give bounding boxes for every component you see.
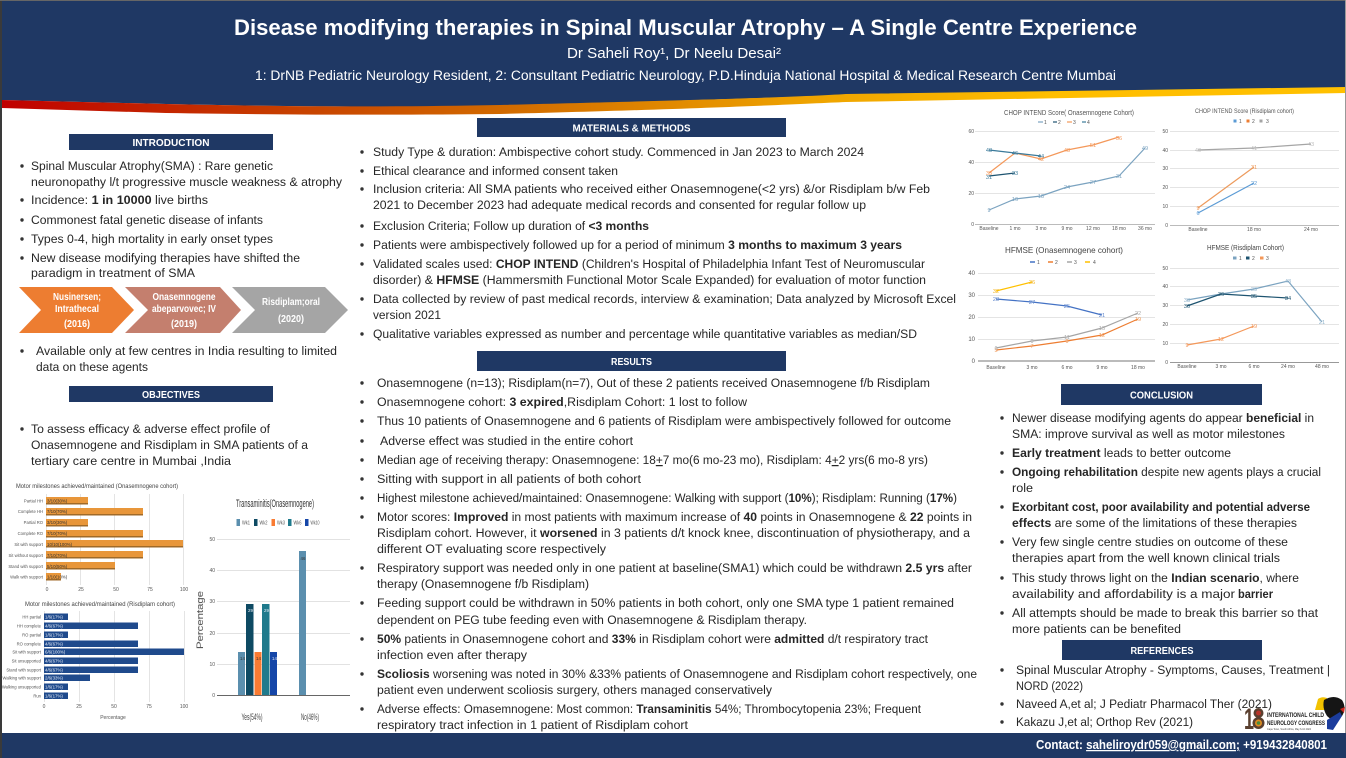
chart: HFMSE Onasemnogene bbox=[968, 245, 1155, 371]
methods bullets: Ethical clearance and informed consent taken bbox=[373, 164, 618, 178]
reference list: Spinal Muscular Atrophy - Symptoms, Causes, Treatment | bbox=[1016, 663, 1330, 677]
chart: HFMSE Risdiplam: 24 mo bbox=[1281, 364, 1295, 370]
chart: HFMSE Onasemnogene: 21 bbox=[1099, 313, 1105, 319]
chart: CHOP INTEND Onasemnogene bbox=[968, 110, 1155, 232]
chart: HFMSE Onasemnogene: 30 bbox=[968, 293, 976, 299]
chart: motor milestones Risdiplam: HH complete bbox=[17, 624, 42, 628]
chart: HFMSE Onasemnogene: 7 bbox=[1030, 344, 1034, 350]
chart: CHOP INTEND Onasemnogene: 48 bbox=[986, 148, 992, 154]
chart: motor milestones Onasemnogene: 50 bbox=[113, 587, 119, 593]
chart: HFMSE Risdiplam: 40 bbox=[1162, 284, 1168, 290]
results bullets: infection even after therapy bbox=[377, 648, 528, 662]
heading: objectives bbox=[69, 386, 273, 402]
header banner bbox=[2, 1, 1346, 115]
chart: HFMSE Risdiplam: 2 bbox=[1252, 256, 1255, 262]
chart: HFMSE Onasemnogene: 20 bbox=[968, 315, 976, 321]
methods bullets: Data collected by review of past medical records, interview & examination; Data analyzed by Microsoft Excel bbox=[373, 292, 956, 306]
chart: HFMSE Onasemnogene: 32 bbox=[993, 289, 999, 295]
chart: HFMSE Risdiplam: 19 bbox=[1251, 324, 1257, 330]
chart: HFMSE Onasemnogene: 25 bbox=[1064, 304, 1070, 310]
objectives text: To assess efficacy & adverse effect profile of bbox=[31, 422, 271, 436]
heading: results bbox=[477, 351, 786, 371]
chart: CHOP INTEND Onasemnogene: 18 mo bbox=[1112, 226, 1126, 232]
affiliations: 1: DrNB Pediatric Neurology Resident, 2: Consultant Pediatric Neurology, P.D.Hinduja National Hospital & Medical Research Centre Mumbai bbox=[255, 68, 1116, 83]
chart: CHOP INTEND Risdiplam: 22 bbox=[1251, 181, 1257, 187]
results bullets: Adverse effects: Omasemnogene: Most common: Transaminitis 54%; Thrombocytopenia 23%; Frequent bbox=[377, 702, 922, 716]
chart: CHOP INTEND Onasemnogene: 42 bbox=[1038, 157, 1044, 163]
logo: International Child Neurology Congress: INTERNATIONAL CHILD bbox=[1267, 712, 1324, 719]
chart: CHOP INTEND Onasemnogene: 31 bbox=[1116, 174, 1122, 180]
header accent wave bbox=[2, 87, 1346, 115]
chart: CHOP INTEND Onasemnogene: 31 bbox=[986, 175, 992, 181]
chart: CHOP INTEND Onasemnogene: 44 bbox=[1038, 154, 1044, 160]
panel: conclusion bbox=[1000, 384, 1321, 636]
conclusion bullets: Very few single centre studies on outcome of these bbox=[1012, 535, 1288, 549]
methods bullets: Validated scales used: CHOP INTEND (Children's Hospital of Philadelphia Infant Test of Neuromuscular bbox=[373, 257, 925, 271]
chart: HFMSE Risdiplam: 10 bbox=[1162, 341, 1168, 347]
chart: CHOP INTEND Risdiplam: Baseline bbox=[1188, 227, 1208, 233]
chart: HFMSE Risdiplam: 36 bbox=[1218, 292, 1224, 298]
chart: motor milestones Risdiplam: Stand with support bbox=[6, 668, 42, 672]
chart: CHOP INTEND Onasemnogene: 3 mo bbox=[1035, 226, 1047, 232]
chart: CHOP INTEND Onasemnogene: Baseline bbox=[979, 226, 999, 232]
heading: materials and methods: MATERIALS & METHODS bbox=[572, 122, 690, 134]
methods bullets bbox=[360, 145, 956, 341]
chart: CHOP INTEND Onasemnogene: 9 bbox=[987, 208, 991, 214]
chart: motor milestones Risdiplam: 2/6(33%) bbox=[45, 676, 63, 680]
legend: weeks: Wk2 bbox=[260, 520, 268, 526]
chart: HFMSE Onasemnogene: 40 bbox=[968, 271, 976, 277]
chart: transaminitis: 10 bbox=[209, 662, 215, 668]
bars: 14 bbox=[272, 656, 277, 661]
conclusion bullets: All attempts should be made to break this barrier so that bbox=[1012, 606, 1319, 620]
logo: International Child Neurology Congress: 1 bbox=[1244, 703, 1254, 736]
chart: CHOP INTEND Risdiplam: 40 bbox=[1195, 148, 1201, 154]
methods bullets: version 2021 bbox=[373, 308, 441, 322]
methods bullets: Exclusion Criteria; Follow up duration of <3 months bbox=[373, 219, 649, 233]
chart: transaminitis: 20 bbox=[209, 631, 215, 637]
chart: HFMSE Onasemnogene: 6 mo bbox=[1061, 365, 1073, 371]
chart: CHOP INTEND Risdiplam: 2 bbox=[1252, 119, 1255, 125]
chart: motor milestones Onasemnogene: 3/10(30%) bbox=[47, 520, 68, 525]
chart: HFMSE Risdiplam: HFMSE (Risdiplam Cohort) bbox=[1207, 245, 1284, 252]
chart: HFMSE Risdiplam: 35 bbox=[1251, 294, 1257, 300]
chart: CHOP INTEND Onasemnogene: 2 bbox=[1058, 120, 1061, 126]
chart: motor milestones Onasemnogene: 0 bbox=[46, 587, 49, 593]
chart: motor milestones Risdiplam: 50 bbox=[111, 704, 117, 710]
legend: weeks: Wk10 bbox=[310, 520, 320, 526]
introduction bullets: Spinal Muscular Atrophy(SMA) : Rare genetic bbox=[31, 159, 273, 173]
chart: HFMSE Onasemnogene: Baseline bbox=[986, 365, 1006, 371]
bars: 29 bbox=[248, 608, 253, 613]
chevron: Onasemnogene 2019: Onasemnogene bbox=[152, 291, 216, 303]
footer bar bbox=[2, 733, 1346, 758]
chart: transaminitis: No(46%) bbox=[301, 712, 319, 722]
chevron: Risdiplam 2020: Risdiplam;oral bbox=[262, 296, 320, 308]
chart: transaminitis: Percentage bbox=[195, 591, 206, 649]
chart: HFMSE Risdiplam: Baseline bbox=[1177, 364, 1197, 370]
conclusion bullets: This study throws light on the Indian scenario, where bbox=[1012, 571, 1299, 585]
chart: HFMSE Onasemnogene: 0 bbox=[972, 359, 976, 365]
chart: HFMSE Onasemnogene: 15 bbox=[1099, 326, 1105, 332]
bars: 14 bbox=[256, 656, 261, 661]
methods bullets: Qualitative variables expressed as number and percentage while quantitative variables as median/SD bbox=[373, 327, 917, 341]
chevron: Onasemnogene 2019: (2019) bbox=[171, 318, 197, 330]
chart: motor milestones Onasemnogene: 7/10(70%) bbox=[47, 553, 68, 558]
chart: motor milestones Risdiplam: Percentage bbox=[100, 715, 126, 721]
chart: transaminitis: Yes(54%) bbox=[242, 712, 262, 722]
introduction bullets: Commonest fatal genetic disease of infants bbox=[31, 213, 263, 227]
chart: CHOP INTEND Risdiplam: 24 mo bbox=[1304, 227, 1318, 233]
chart: motor milestones Risdiplam: 1/6(17%) bbox=[45, 632, 63, 638]
chart: HFMSE Risdiplam: 50 bbox=[1162, 266, 1168, 272]
chevron: Onasemnogene 2019 bbox=[125, 287, 241, 333]
methods bullets: Patients were ambispectively followed up for a period of minimum 3 months to maximum 3 years bbox=[373, 238, 902, 252]
chart: motor milestones Onasemnogene: 25 bbox=[78, 587, 84, 593]
chart: transaminitis: 0 bbox=[212, 693, 215, 699]
methods bullets: Study Type & duration: Ambispective cohort study. Commenced in Jan 2023 to March 2024 bbox=[373, 145, 864, 159]
chart: motor milestones Onasemnogene: 100 bbox=[180, 587, 188, 593]
heading: references bbox=[1062, 640, 1262, 660]
chart: motor milestones Onasemnogene: Complete RO bbox=[18, 531, 44, 536]
chart: motor milestones Risdiplam: 4/6(67%) bbox=[45, 624, 63, 628]
reference list bbox=[1000, 663, 1330, 729]
chart: HFMSE Onasemnogene: 28 bbox=[993, 297, 999, 303]
chart: CHOP INTEND Onasemnogene: 20 bbox=[968, 191, 974, 197]
chart: motor milestones Onasemnogene: Motor milestones achieved/maintained (Onasemnogene cohort) bbox=[16, 483, 178, 490]
chart: motor milestones Risdiplam: RO complete bbox=[17, 642, 42, 646]
heading: conclusion bbox=[1061, 384, 1262, 405]
chart: motor milestones Risdiplam: 4/6(67%) bbox=[45, 658, 63, 664]
chart: HFMSE Risdiplam: 43 bbox=[1285, 279, 1291, 285]
chart: CHOP INTEND Onasemnogene: 40 bbox=[968, 160, 974, 166]
chart: motor milestones Risdiplam: 100 bbox=[180, 704, 188, 710]
conclusion bullets: Early treatment leads to better outcome bbox=[1012, 446, 1231, 460]
results bullets: Thus 10 patients of Onasemnogene and 6 patients of Risdiplam were ambispectively followed for outcome bbox=[377, 414, 951, 428]
conclusion bullets: therapies apart from the well known clinical trials bbox=[1012, 551, 1280, 565]
chart: HFMSE Onasemnogene: 9 bbox=[1030, 339, 1034, 345]
chart: motor milestones Risdiplam: 1/6(17%) bbox=[45, 694, 63, 698]
chart: motor milestones Risdiplam: HH partial bbox=[22, 614, 41, 620]
chart: CHOP INTEND Onasemnogene: 16 bbox=[1012, 197, 1018, 203]
bars: 29 bbox=[264, 608, 269, 613]
chart: HFMSE Onasemnogene: 1 bbox=[1037, 260, 1040, 266]
chart: CHOP INTEND Risdiplam: 9 bbox=[1196, 206, 1200, 212]
panel: materials and methods bbox=[360, 118, 956, 341]
results bullets: patient even underwent scoliosis surgery, others managed conservatively bbox=[377, 683, 773, 697]
chevron: Nusinersen 2016: Intrathecal bbox=[55, 303, 99, 315]
chart: HFMSE Risdiplam: 12 bbox=[1218, 337, 1224, 343]
chart: motor milestones Risdiplam: Walking with support bbox=[3, 676, 42, 680]
chart: HFMSE Risdiplam: 9 bbox=[1185, 343, 1189, 349]
chart: transaminitis: Transaminitis(Onasemnogene) bbox=[236, 498, 314, 510]
chevron: Onasemnogene 2019: abeparvovec; IV bbox=[152, 303, 216, 315]
conclusion bullets: Newer disease modifying agents do appear beneficial in bbox=[1012, 411, 1314, 425]
chart: CHOP INTEND Onasemnogene: 1 bbox=[1044, 120, 1047, 126]
chart: motor milestones Onasemnogene: 3/10(30%) bbox=[47, 498, 68, 504]
chart: HFMSE Onasemnogene: 5 bbox=[994, 348, 998, 354]
bars: 46 bbox=[300, 556, 306, 561]
reference list: NORD (2022) bbox=[1016, 679, 1083, 693]
objectives text: tertiary care centre in Mumbai ,India bbox=[31, 454, 231, 468]
title: Disease modifying therapies in Spinal Muscular Atrophy – A Single Centre Experience bbox=[234, 15, 1137, 40]
chart: motor milestones Risdiplam: 4/6(67%) bbox=[45, 668, 63, 672]
chart: motor milestones Risdiplam: Sit with support bbox=[12, 650, 42, 654]
methods bullets: Inclusion criteria: All SMA patients who received either Onasemnogene(<2 yrs) &/or Risdiplam b/w Feb bbox=[373, 182, 930, 196]
heading: introduction bbox=[69, 134, 273, 150]
chart: CHOP INTEND Onasemnogene: 33 bbox=[986, 171, 992, 177]
availability note bbox=[20, 344, 337, 374]
chart: CHOP INTEND Onasemnogene: 9 mo bbox=[1061, 226, 1073, 232]
results bullets: dependent on PEG tube feeding even with Onasemnogene & Risdiplam therapy. bbox=[377, 613, 807, 627]
results bullets: Onasemnogene (n=13); Risdiplam(n=7), Out of these 2 patients received Onasemnogene f/b Risdiplam bbox=[377, 376, 930, 390]
introduction bullets: Incidence: 1 in 10000 live births bbox=[31, 193, 208, 207]
methods bullets: 2021 to December 2023 had adequate medical records and consented for regular follow up bbox=[373, 198, 866, 212]
chart: CHOP INTEND Risdiplam: 31 bbox=[1251, 165, 1257, 171]
results bullets: Sitting with support in all patients of both cohort bbox=[377, 472, 642, 486]
chart: motor milestones Risdiplam bbox=[2, 601, 188, 721]
chart: HFMSE Onasemnogene: 27 bbox=[1029, 300, 1035, 306]
chart: HFMSE Risdiplam: 6 mo bbox=[1248, 364, 1260, 370]
logo: International Child Neurology Congress bbox=[1244, 697, 1345, 736]
chart: motor milestones Onasemnogene: Complete HH bbox=[18, 509, 43, 514]
chart: HFMSE Risdiplam: 30 bbox=[1162, 303, 1168, 309]
chart: transaminitis bbox=[195, 498, 350, 722]
chart: CHOP INTEND Onasemnogene: 1 mo bbox=[1009, 226, 1021, 232]
chart: CHOP INTEND Onasemnogene: 33 bbox=[1012, 171, 1018, 177]
chart: CHOP INTEND Onasemnogene: 24 bbox=[1064, 185, 1070, 191]
reference list: Naveed A,et al; J Pediatr Pharmacol Ther (2021) bbox=[1016, 697, 1272, 711]
timeline chevrons bbox=[19, 287, 348, 333]
results bullets: Motor scores: Improved in most patients with maximum increase of 40 points in Onasemnogene & 22 points in bbox=[377, 510, 972, 524]
chart: CHOP INTEND Onasemnogene: 60 bbox=[968, 129, 974, 135]
chart: transaminitis: 30 bbox=[209, 599, 215, 605]
chart: HFMSE Risdiplam: 3 bbox=[1266, 256, 1269, 262]
heading: objectives: OBJECTIVES bbox=[142, 389, 200, 401]
heading: introduction: INTRODUCTION bbox=[132, 137, 210, 149]
chart: motor milestones Onasemnogene: Walk with support bbox=[10, 574, 44, 580]
chevron: Nusinersen 2016: (2016) bbox=[64, 318, 90, 330]
chart: motor milestones Onasemnogene: 10/10(100%) bbox=[47, 542, 73, 547]
chart: motor milestones Risdiplam: 25 bbox=[76, 704, 82, 710]
chevron: Nusinersen 2016: Nusinersen; bbox=[53, 291, 101, 303]
heading: results: RESULTS bbox=[611, 356, 652, 368]
chart: motor milestones Risdiplam: 6/6(100%) bbox=[45, 650, 66, 654]
results bullets: 50% patients in Onasemnogene cohort and 33% in Risdiplam cohort were admitted d/t respiratory tract bbox=[377, 632, 929, 646]
introduction bullets: Types 0-4, high mortality in early onset types bbox=[31, 232, 273, 246]
chart: CHOP INTEND Onasemnogene: CHOP INTEND Score( Onasemnogene Cohort) bbox=[1004, 110, 1134, 117]
objectives text: Onasemnogene and Risdiplam in SMA patients of a bbox=[31, 438, 308, 452]
chart: motor milestones Onasemnogene: 7/10(70%) bbox=[47, 509, 68, 514]
results bullets: therapy (Onasemnogene f/b Risdiplam) bbox=[377, 577, 589, 591]
chart: HFMSE Risdiplam: 48 mo bbox=[1315, 364, 1329, 370]
chart: CHOP INTEND Onasemnogene: 18 bbox=[1038, 194, 1044, 200]
chart: motor milestones Onasemnogene: Sit with support bbox=[14, 542, 44, 547]
results bullets: Respiratory support was needed only in one patient at baseline(SMA1) which could be withdrawn 2.5 yrs after bbox=[377, 561, 972, 575]
chart: motor milestones Risdiplam: Sit unsupported bbox=[12, 658, 42, 664]
chart: motor milestones Onasemnogene: 5/10(50%) bbox=[47, 564, 68, 569]
chart: CHOP INTEND Onasemnogene: 0 bbox=[971, 222, 974, 228]
bars bbox=[238, 551, 306, 695]
chart: HFMSE Onasemnogene: 18 mo bbox=[1131, 365, 1145, 371]
results bullets: Median age of receiving therapy: Onasemnogene: 18+7 mo(6 mo-23 mo), Risdiplam: 4+2 yrs(6 mo-8 yrs) bbox=[377, 453, 928, 467]
introduction bullets: neuronopathy l/t progressive muscle weakness & atrophy bbox=[31, 175, 343, 189]
chart: HFMSE Risdiplam: 0 bbox=[1165, 360, 1168, 366]
chart: HFMSE Onasemnogene: 12 bbox=[1099, 333, 1105, 339]
chevron: Risdiplam 2020 bbox=[232, 287, 348, 333]
results bullets: Onasemnogene cohort: 3 expired,Risdiplam Cohort: 1 lost to follow bbox=[377, 395, 747, 409]
logo: International Child Neurology Congress: Cape Town, South Africa, May 6-10 2024 bbox=[1267, 727, 1311, 731]
results bullets: Adverse effect was studied in the entire cohort bbox=[380, 434, 634, 448]
panel: results bbox=[360, 351, 977, 732]
conclusion bullets: effects are some of the limitations of these therapies bbox=[1012, 516, 1297, 530]
chart: motor milestones Risdiplam: RO partial bbox=[22, 632, 41, 638]
chart: motor milestones Onasemnogene: 7/10(70%) bbox=[47, 531, 68, 536]
objectives text bbox=[20, 422, 308, 468]
conclusion bullets: SMA: improve survival as well as motor milestones bbox=[1012, 427, 1285, 441]
chart: HFMSE Onasemnogene: 9 mo bbox=[1096, 365, 1108, 371]
chart: motor milestones Onasemnogene bbox=[8, 483, 188, 593]
results bullets: Feeding support could be withdrawn in 50% patients in both cohort, only one SMA type 1 patient remained bbox=[377, 596, 954, 610]
chart: CHOP INTEND Risdiplam: 3 bbox=[1266, 119, 1269, 125]
bars: 14 bbox=[240, 656, 245, 661]
chart: HFMSE Risdiplam: 3 mo bbox=[1215, 364, 1227, 370]
chart: CHOP INTEND Risdiplam: 1 bbox=[1239, 119, 1242, 125]
results bullets bbox=[360, 376, 977, 732]
chart: CHOP INTEND Onasemnogene: 48 bbox=[1064, 148, 1070, 154]
legend: weeks bbox=[236, 519, 320, 526]
conclusion bullets: availability and affordability is a major bbox=[1012, 587, 1235, 601]
conclusion bullets: Ongoing rehabilitation despite new agents plays a crucial bbox=[1012, 465, 1321, 479]
chart: HFMSE Risdiplam: 1 bbox=[1239, 256, 1242, 262]
chevron: Nusinersen 2016 bbox=[19, 287, 134, 333]
chart: CHOP INTEND Risdiplam: 6 bbox=[1196, 211, 1200, 217]
chart: HFMSE Onasemnogene: 22 bbox=[1135, 311, 1141, 317]
panel: objectives bbox=[20, 386, 308, 468]
chart: motor milestones Risdiplam: 4/6(67%) bbox=[45, 642, 63, 646]
chart: CHOP INTEND Onasemnogene: 46 bbox=[1012, 151, 1018, 157]
chart: HFMSE Onasemnogene: 3 mo bbox=[1026, 365, 1038, 371]
chart: HFMSE Onasemnogene: 10 bbox=[968, 337, 976, 343]
heading: materials and methods bbox=[477, 118, 786, 137]
legend: weeks: Wk6 bbox=[294, 520, 302, 526]
chart: CHOP INTEND Risdiplam: CHOP INTEND Score (Risdiplam cohort) bbox=[1195, 108, 1294, 115]
chart: HFMSE Onasemnogene: 36 bbox=[1029, 280, 1035, 286]
chart: HFMSE Onasemnogene: 9 bbox=[1065, 339, 1069, 345]
chevron: Risdiplam 2020: (2020) bbox=[278, 313, 304, 325]
chart: HFMSE Onasemnogene: 6 bbox=[994, 346, 998, 352]
conclusion bullets: more patients can be benefited bbox=[1012, 622, 1181, 636]
chart: motor milestones Onasemnogene: Stand with support bbox=[8, 564, 44, 569]
reference list: Kakazu J,et al; Orthop Rev (2021) bbox=[1016, 715, 1193, 729]
chart: motor milestones Onasemnogene: 1/10(10%) bbox=[47, 574, 68, 580]
chart: HFMSE Risdiplam: 20 bbox=[1162, 322, 1168, 328]
chart: CHOP INTEND Onasemnogene: 3 bbox=[1073, 120, 1076, 126]
logo: International Child Neurology Congress: NEUROLOGY CONGRESS bbox=[1267, 720, 1325, 727]
chart: CHOP INTEND Risdiplam: 43 bbox=[1308, 142, 1314, 148]
chart: CHOP INTEND Risdiplam: 20 bbox=[1162, 185, 1168, 191]
chart: motor milestones Risdiplam: Motor milestones achieved/maintained (Risdiplam cohort) bbox=[25, 601, 175, 608]
results bullets: Highest milestone achieved/maintained: Onasemnogene: Walking with support (10%); Risdiplam: Running (17%) bbox=[377, 491, 957, 505]
results bullets: respiratory tract infection in 1 patient of Risdiplam cohort bbox=[377, 718, 689, 732]
chart: motor milestones Risdiplam: 1/6(17%) bbox=[45, 684, 63, 690]
chart: motor milestones Risdiplam: 0 bbox=[43, 704, 46, 710]
chart: transaminitis: 50 bbox=[209, 537, 215, 543]
chart: CHOP INTEND Onasemnogene: 36 mo bbox=[1138, 226, 1152, 232]
chart: HFMSE Risdiplam: 34 bbox=[1285, 296, 1291, 302]
panel: introduction bbox=[19, 134, 348, 374]
chart: CHOP INTEND Risdiplam: 40 bbox=[1162, 148, 1168, 154]
chart: CHOP INTEND Onasemnogene: 56 bbox=[1116, 136, 1122, 142]
results bullets: Scoliosis worsening was noted in 30% &33% patients of Onasemnogene and Risdiplam cohort respectively, one bbox=[377, 667, 977, 681]
chart: CHOP INTEND Risdiplam bbox=[1162, 108, 1339, 233]
chart: motor milestones Onasemnogene: Sit without support bbox=[9, 553, 44, 558]
chart: HFMSE Risdiplam: 30 bbox=[1184, 304, 1190, 310]
conclusion bullets: role bbox=[1012, 481, 1033, 495]
chart: motor milestones Onasemnogene: Partial HH bbox=[24, 498, 43, 504]
chart: HFMSE Risdiplam bbox=[1162, 245, 1339, 370]
chart: CHOP INTEND Risdiplam: 30 bbox=[1162, 166, 1168, 172]
heading: conclusion: CONCLUSION bbox=[1130, 390, 1193, 402]
methods bullets: disorder) & HFMSE (Hammersmith Functional Motor Scale Expanded) for evaluation of motor function bbox=[373, 273, 926, 287]
chart: HFMSE Onasemnogene: 3 bbox=[1074, 260, 1077, 266]
chart: CHOP INTEND Risdiplam: 50 bbox=[1162, 129, 1168, 135]
chart: HFMSE Risdiplam: 21 bbox=[1319, 320, 1325, 326]
chart: motor milestones Onasemnogene: Partial RO bbox=[24, 520, 44, 525]
chart: HFMSE Onasemnogene: 4 bbox=[1093, 260, 1096, 266]
chart: motor milestones Onasemnogene: 75 bbox=[147, 587, 153, 593]
panel: references bbox=[1000, 640, 1330, 729]
chart: HFMSE Onasemnogene: HFMSE (Onasemnogene cohort) bbox=[1005, 245, 1123, 255]
introduction bullets: New disease modifying therapies have shifted the bbox=[31, 251, 300, 265]
availability note: Available only at few centres in India resulting to limited bbox=[36, 344, 337, 358]
chart: CHOP INTEND Onasemnogene: 49 bbox=[1142, 146, 1148, 152]
chart: HFMSE Onasemnogene: 11 bbox=[1064, 335, 1070, 341]
chart: motor milestones Risdiplam: Run bbox=[33, 694, 42, 698]
chart: CHOP INTEND Onasemnogene: 51 bbox=[1090, 143, 1096, 149]
chart: HFMSE Risdiplam: 39 bbox=[1251, 287, 1257, 293]
conclusion bullets: barrier bbox=[1238, 587, 1273, 601]
chart: CHOP INTEND Onasemnogene: 27 bbox=[1090, 180, 1096, 186]
introduction bullets: paradigm in treatment of SMA bbox=[31, 266, 196, 280]
contact details: Contact: saheliroydr059@gmail.com; +919432840801 bbox=[1036, 738, 1327, 752]
chart: CHOP INTEND Risdiplam: 10 bbox=[1162, 204, 1168, 210]
legend: weeks: Wk1 bbox=[242, 520, 250, 526]
chart: motor milestones Risdiplam: Walking unsupported bbox=[2, 684, 42, 690]
chart: motor milestones Risdiplam: 75 bbox=[146, 704, 152, 710]
chart: HFMSE Onasemnogene: 19 bbox=[1135, 317, 1141, 323]
results bullets: different OT evaluating score respectively bbox=[377, 542, 607, 556]
chart: CHOP INTEND Risdiplam: 18 mo bbox=[1247, 227, 1261, 233]
introduction bullets bbox=[20, 159, 343, 280]
availability note: data on these agents bbox=[36, 360, 148, 374]
chart: CHOP INTEND Onasemnogene: 4 bbox=[1087, 120, 1090, 126]
legend: weeks: Wk3 bbox=[277, 520, 285, 526]
chart: CHOP INTEND Risdiplam: 41 bbox=[1251, 146, 1257, 152]
chart: transaminitis: 40 bbox=[209, 568, 215, 574]
authors: Dr Saheli Roy¹, Dr Neelu Desai² bbox=[567, 46, 781, 62]
conclusion bullets bbox=[1000, 411, 1321, 636]
chart: HFMSE Risdiplam: 33 bbox=[1184, 298, 1190, 304]
results bullets: Risdiplam cohort. However, it worsened in 3 patients d/t knock knee, discontinuation of physiotherapy, and a bbox=[377, 526, 970, 540]
chart: HFMSE Onasemnogene: 2 bbox=[1055, 260, 1058, 266]
chart: motor milestones Risdiplam: 1/6(17%) bbox=[45, 614, 63, 620]
conclusion bullets: Exorbitant cost, poor availability and potential adverse bbox=[1012, 500, 1310, 514]
heading: references: REFERENCES bbox=[1130, 645, 1194, 657]
chart: CHOP INTEND Risdiplam: 0 bbox=[1165, 223, 1168, 229]
chart: CHOP INTEND Onasemnogene: 12 mo bbox=[1086, 226, 1100, 232]
